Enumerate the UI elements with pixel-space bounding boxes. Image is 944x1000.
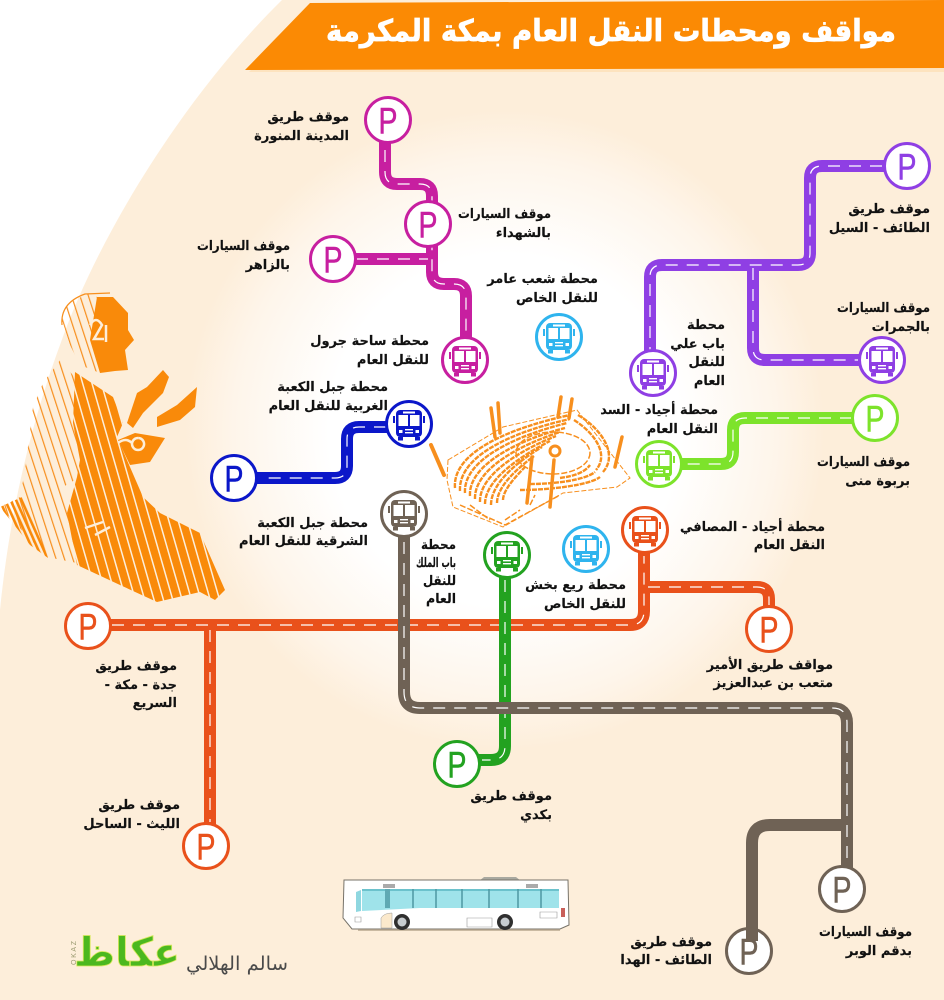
stop: Jeddah Makkah Road parking	[66, 604, 110, 648]
label: Shaab Amer: محطة شعب عامر	[486, 272, 598, 287]
label: Rabwat Mina	[817, 455, 910, 489]
label: Al Zaher: بالزاهر	[245, 258, 290, 273]
route: light green line	[636, 396, 898, 486]
logo: Okaz: عكاظ	[74, 930, 180, 976]
stop: Bakkah Road parking: P	[448, 744, 466, 786]
stop: Al Zaher parking	[310, 236, 356, 282]
label: Jamarat: موقف السيارات	[837, 301, 930, 316]
label: Bab Al Malik: للنقل	[423, 574, 456, 589]
label: Daqm Al Wabr	[819, 925, 912, 959]
label: Taif Al Hada	[620, 935, 712, 968]
label: Jamarat	[837, 301, 930, 335]
label: Bab Al Malik: العام	[426, 592, 456, 607]
stop: Daqm Al Wabr parking	[820, 866, 864, 912]
label: Rea Bakhsh: للنقل الخاص	[544, 597, 626, 612]
label: Bab Ali: محطة	[687, 318, 725, 333]
label: Al Shuhada	[458, 207, 551, 241]
label: Al Shuhada: موقف السيارات	[458, 207, 551, 222]
label: Ajyad Al Sadd: محطة أجياد - السد	[600, 401, 718, 418]
label: Al Lith Road	[83, 798, 180, 832]
label: Bab Ali	[670, 318, 725, 389]
stop: Bakkah Road parking	[434, 742, 480, 786]
label: East Jabal Al Kaaba: الشرقية للنقل العام	[239, 534, 368, 549]
stop: Al Zaher parking: P	[324, 240, 342, 280]
illustration: bus	[343, 877, 569, 930]
route: purple line	[630, 144, 930, 396]
stop: West Jabal Al Kaaba station	[386, 402, 432, 446]
stop: Al Shuhada parking	[406, 202, 450, 246]
stop: Jarwal station	[442, 338, 488, 382]
label: West Jabal Al Kaaba	[269, 380, 388, 414]
stop: Bab Al Malik station	[484, 532, 530, 578]
stop: Rabwat Mina parking: P	[866, 398, 884, 440]
label: Daqm Al Wabr: موقف السيارات	[819, 925, 912, 940]
stop: Taif Seil parking: P	[898, 146, 916, 188]
label: Taif Al Hada: موقف طريق	[630, 935, 712, 950]
label: Bakkah Road: موقف طريق	[470, 789, 552, 804]
stop: Ajyad Al Masafi station	[622, 508, 668, 552]
label: East Jabal Al Kaaba	[239, 516, 368, 549]
stop: Taif Al Hada parking	[726, 928, 772, 974]
label: Bakkah Road	[470, 789, 552, 823]
stop: East Jabal Al Kaaba station	[382, 492, 426, 536]
label: Taif Seil	[829, 202, 930, 236]
stop: Bab Ali station	[630, 350, 676, 396]
private transport station: Shaab Amer	[536, 314, 582, 360]
label: Jarwal	[310, 334, 429, 368]
label: Bab Al Malik: محطة	[421, 538, 456, 553]
label: Ajyad Al Sadd: النقل العام	[647, 422, 718, 437]
stop: Daqm Al Wabr parking: P	[832, 870, 852, 910]
illustration: praying man	[0, 293, 225, 602]
label: Al Lith Road: الليث - الساحل	[83, 817, 180, 832]
title: مواقف ومحطات النقل العام بمكة المكرمة	[326, 14, 896, 49]
label: Jarwal: محطة ساحة جرول	[310, 334, 429, 349]
stop: blue parking: P	[224, 458, 244, 500]
label: Al Shuhada: بالشهداء	[496, 226, 551, 241]
route: grey line	[382, 492, 864, 974]
label: East Jabal Al Kaaba: محطة جبل الكعبة	[257, 516, 368, 531]
label: Medina Road	[254, 110, 349, 144]
label: Jeddah Makkah Road: السريع	[133, 696, 177, 711]
stop: blue parking	[212, 456, 256, 500]
label: West Jabal Al Kaaba: محطة جبل الكعبة	[277, 380, 388, 395]
title banner	[245, 0, 944, 72]
stop: Taif Seil parking	[884, 144, 930, 188]
label: Bab Ali: باب علي	[670, 337, 725, 352]
logo: Okaz: OKAZ	[71, 940, 78, 965]
stop: Prince Miteb parking: P	[760, 610, 778, 650]
label: Shaab Amer: للنقل الخاص	[516, 291, 598, 306]
label: Shaab Amer	[486, 272, 598, 306]
label: Jeddah Makkah Road: جدة - مكة -	[105, 678, 177, 693]
label: Prince Miteb: مواقف طريق الأمير	[706, 656, 833, 673]
label: Jarwal: للنقل العام	[357, 353, 429, 368]
label: Al Zaher	[197, 239, 290, 273]
label: Rea Bakhsh: محطة ريع بخش	[525, 578, 626, 593]
author credit: سالم الهلالي	[186, 953, 288, 975]
stop: Al Shuhada parking: P	[418, 204, 438, 246]
stop: Taif Al Hada parking: P	[740, 932, 758, 972]
label: Ajyad Al Masafi: محطة أجياد - المصافي	[680, 518, 825, 535]
label: Taif Seil: موقف طريق	[848, 202, 930, 217]
route: dark green line	[434, 532, 530, 786]
stop: Medina Road parking	[366, 98, 410, 142]
label: West Jabal Al Kaaba: الغربية للنقل العام	[269, 399, 388, 414]
label: Bab Ali: العام	[694, 374, 725, 389]
label: Al Lith Road: موقف طريق	[98, 798, 180, 813]
route: magenta line	[310, 98, 488, 382]
label: Rea Bakhsh	[525, 578, 626, 612]
label: Bakkah Road: بكدي	[520, 808, 552, 823]
label: Ajyad Al Masafi	[680, 518, 825, 553]
label: Taif Al Hada: الطائف - الهدا	[620, 953, 712, 968]
label: Al Zaher: موقف السيارات	[197, 239, 290, 254]
label: Ajyad Al Masafi: النقل العام	[754, 538, 825, 553]
label: Jeddah Makkah Road	[95, 659, 177, 711]
stop: Jeddah Makkah Road parking: P	[78, 606, 98, 648]
label: Prince Miteb	[706, 656, 833, 691]
label: Medina Road: المدينة المنورة	[254, 129, 349, 144]
stop: Ajyad Al Sadd station	[636, 442, 682, 486]
label: Medina Road: موقف طريق	[267, 110, 349, 125]
label: Taif Seil: الطائف - السيل	[829, 221, 930, 236]
stop: Prince Miteb parking	[746, 606, 792, 652]
route: orange line	[66, 508, 792, 868]
stop: Medina Road parking: P	[378, 100, 398, 142]
stop: Al Lith Road parking	[184, 824, 228, 868]
label: Jeddah Makkah Road: موقف طريق	[95, 659, 177, 674]
stop: Rabwat Mina parking	[852, 396, 898, 440]
label: Ajyad Al Sadd	[600, 401, 718, 437]
stop: Al Lith Road parking: P	[196, 826, 216, 868]
label: Rabwat Mina: بربوة منى	[845, 474, 910, 489]
label: Bab Ali: للنقل	[689, 355, 725, 370]
label: Bab Al Malik	[416, 538, 456, 607]
label: Rabwat Mina: موقف السيارات	[817, 455, 910, 470]
illustration: Grand Mosque	[431, 397, 630, 527]
stop: Jamarat parking	[860, 338, 904, 382]
label: Daqm Al Wabr: بدقم الوبر	[845, 944, 912, 959]
label: Bab Al Malik: باب الملك	[416, 556, 456, 571]
route: blue line	[212, 402, 432, 500]
label: Prince Miteb: متعب بن عبدالعزيز	[712, 676, 833, 691]
label: Jamarat: بالجمرات	[872, 320, 930, 335]
private transport station: Rea Bakhsh	[564, 526, 608, 572]
